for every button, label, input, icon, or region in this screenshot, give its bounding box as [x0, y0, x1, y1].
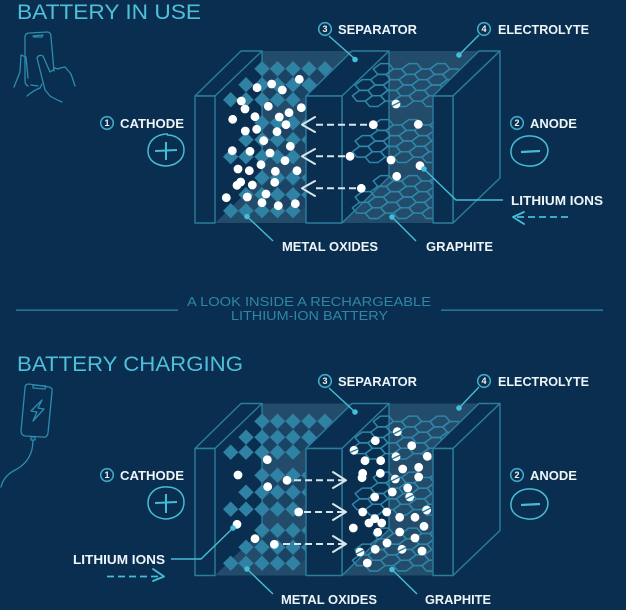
label: separator, in use: SEPARATOR: [338, 22, 417, 37]
label: electrolyte, in use: 4: [481, 24, 487, 34]
icon: hand holding phone: [14, 32, 75, 102]
charging arrows: [283, 472, 346, 552]
icon: minus sign, charging: [511, 489, 548, 519]
ions: moving and anode side, charging: [270, 427, 432, 567]
label: electrolyte, charging: 4: [481, 376, 487, 386]
label: separator, in use: 3: [322, 24, 328, 34]
discharge arrows: [302, 117, 369, 196]
label: cathode, charging: CATHODE: [120, 468, 184, 483]
label: electrolyte, in use: ELECTROLYTE: [498, 22, 589, 37]
ions: cathode side, in use: [222, 75, 306, 210]
label: lithium ions, in use: [421, 166, 603, 208]
label: separator, charging: SEPARATOR: [338, 374, 417, 389]
label: graphite, charging: [389, 567, 491, 607]
label: lithium ions, charging: [73, 525, 236, 567]
battery diagram: in use: [195, 51, 500, 223]
subtitle: A LOOK INSIDE A RECHARGEABLE: [187, 295, 431, 309]
arrow: ion direction, in use: [513, 212, 568, 224]
label: graphite, in use: [389, 214, 493, 254]
label: anode, in use: [511, 116, 577, 131]
label: separator, charging: [319, 374, 417, 415]
divider: right: [441, 310, 603, 311]
label: graphite, charging: GRAPHITE: [425, 592, 491, 607]
label: anode, charging: 2: [514, 470, 520, 480]
subtitle: LITHIUM-ION BATTERY: [231, 309, 389, 323]
label: metal oxides, in use: METAL OXIDES: [282, 239, 378, 254]
label: metal oxides, in use: [244, 214, 378, 254]
icon: plus sign, charging: [148, 487, 184, 519]
label: cathode, in use: CATHODE: [120, 116, 184, 131]
label: separator, charging: 3: [322, 376, 328, 386]
icon: plus sign, in use: [148, 134, 184, 166]
label: separator, in use: [319, 22, 417, 62]
subtitle: [187, 295, 431, 323]
label: electrolyte, in use: [456, 22, 589, 58]
label: lithium ions, in use: LITHIUM IONS: [511, 193, 603, 208]
title: battery charging: BATTERY CHARGING: [17, 353, 243, 376]
label: electrolyte, charging: [456, 374, 589, 411]
ions: cathode side, charging: [233, 455, 272, 543]
label: metal oxides, charging: METAL OXIDES: [281, 592, 377, 607]
icon: minus sign, in use: [511, 136, 548, 166]
icon: phone charging: [1, 384, 52, 487]
label: cathode, in use: 1: [104, 118, 110, 128]
label: lithium ions, charging: LITHIUM IONS: [73, 552, 165, 567]
divider: left: [16, 310, 178, 311]
label: anode, charging: ANODE: [530, 468, 577, 483]
label: anode, in use: ANODE: [530, 116, 577, 131]
label: electrolyte, charging: ELECTROLYTE: [498, 374, 589, 389]
battery diagram: charging: [195, 404, 500, 576]
title: battery in use: BATTERY IN USE: [17, 1, 201, 24]
label: graphite, in use: GRAPHITE: [426, 239, 493, 254]
arrow: ion direction, charging: [107, 569, 164, 581]
label: anode, charging: [511, 468, 577, 483]
label: cathode, charging: 1: [104, 470, 110, 480]
label: anode, in use: 2: [514, 118, 520, 128]
ions: anode side, in use: [346, 100, 424, 193]
label: metal oxides, charging: [244, 566, 377, 607]
